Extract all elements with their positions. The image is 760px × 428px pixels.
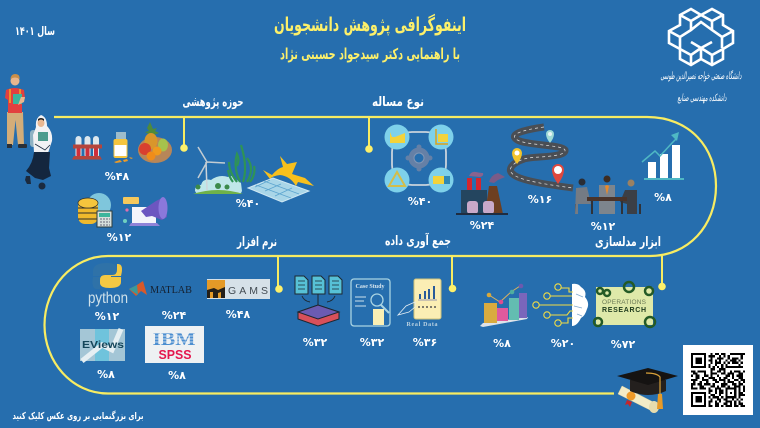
value: 12% tool top: %۱۲ bbox=[591, 220, 616, 233]
heading: research area: حوزه پژوهشی bbox=[182, 95, 244, 110]
logo: IBM SPSS: IBM bbox=[152, 329, 196, 349]
icon: seaweed bbox=[228, 145, 254, 182]
value: 12% research: %۱۲ bbox=[107, 231, 132, 244]
icon: case study bbox=[351, 279, 390, 326]
icon: female student bbox=[25, 115, 52, 190]
value: 20% brain: %۲۰ bbox=[551, 337, 575, 350]
icon: 3D bar chart bbox=[480, 284, 528, 327]
footer note: برای بزرگنمایی بر روی عکس کلیک کنید bbox=[12, 410, 144, 422]
year label: سال ۱۴۰۱ bbox=[15, 24, 55, 38]
icon: factory bbox=[456, 172, 508, 215]
value: 16% problem: %۱۶ bbox=[528, 193, 552, 206]
heading: software: نرم افزار bbox=[236, 235, 277, 250]
value: 8% eviews: %۸ bbox=[97, 368, 115, 381]
icon: university logo bbox=[669, 9, 733, 65]
value: 40% energy: %۴۰ bbox=[236, 197, 260, 210]
icon: solar panel and sun bbox=[248, 156, 314, 202]
value: 24% problem: %۲۴ bbox=[470, 219, 495, 232]
logo: MATLAB: MATLAB bbox=[150, 284, 192, 296]
value: 24% matlab: %۲۴ bbox=[162, 309, 187, 322]
value: 40% problem: %۴۰ bbox=[408, 195, 432, 208]
icon: python logo bbox=[88, 263, 128, 307]
icon: male student bbox=[5, 74, 27, 148]
logo: IBM SPSS bbox=[145, 326, 204, 363]
heading: modeling tool: ابزار مدلسازی bbox=[595, 235, 661, 250]
icon: AI brain bbox=[533, 284, 588, 326]
icon: operations research: OPERATIONS bbox=[602, 299, 647, 306]
icon: winding road with pins bbox=[510, 127, 573, 188]
value: 32% documents: %۳۲ bbox=[303, 336, 328, 349]
icon: real data tablet bbox=[398, 279, 441, 328]
icon: supply chain network bbox=[384, 124, 454, 192]
value: 72% OR: %۷۲ bbox=[611, 338, 636, 351]
icon: graduation cap and diploma bbox=[617, 368, 678, 413]
icon: fruit plate bbox=[138, 122, 172, 163]
logo: MATLAB bbox=[129, 281, 192, 296]
value: 8% spss: %۸ bbox=[168, 369, 186, 382]
value: 48% gams: %۴۸ bbox=[226, 308, 251, 321]
QR code bbox=[683, 345, 753, 415]
value: 48% research: %۴۸ bbox=[105, 170, 130, 183]
heading: data collection: جمع آوری داده bbox=[385, 232, 451, 249]
icon: real data tablet: Real Data bbox=[406, 322, 438, 328]
value: 36% real data: %۳۶ bbox=[413, 336, 437, 349]
logo: IBM SPSS: SPSS bbox=[158, 347, 192, 362]
icon: operations research bbox=[594, 282, 655, 327]
logo: GAMS: GAMS bbox=[228, 285, 268, 297]
heading: problem type: نوع مساله bbox=[372, 95, 424, 110]
icon: case study: Case Study bbox=[356, 284, 384, 290]
icon: documents into database bbox=[295, 276, 342, 326]
subtitle: supervisor: با راهنمایی دکتر سیدجواد حسینی نژاد bbox=[280, 45, 460, 63]
value: 32% case study: %۳۲ bbox=[360, 336, 385, 349]
value: 8% chart: %۸ bbox=[493, 337, 511, 350]
icon: business meeting bbox=[575, 176, 640, 214]
value: 8% tool top: %۸ bbox=[654, 191, 672, 204]
timeline nodes bbox=[180, 144, 666, 293]
icon: megaphone bbox=[123, 197, 168, 226]
icon: test tubes bbox=[72, 136, 102, 160]
value: 12% python: %۱۲ bbox=[95, 310, 120, 323]
logo: GAMS bbox=[207, 279, 270, 299]
logo: EViews bbox=[80, 329, 125, 361]
logo: EViews: EViews bbox=[82, 339, 124, 351]
icon: wind turbine landscape bbox=[193, 147, 243, 194]
icon: medicine bottle bbox=[114, 132, 133, 163]
title: اینفوگرافی پژوهش دانشجویان bbox=[274, 13, 466, 36]
icon: coins and calculator bbox=[78, 193, 112, 227]
icon: operations research: RESEARCH bbox=[602, 307, 646, 314]
icon: python logo: python bbox=[88, 290, 128, 307]
timeline path bbox=[44, 117, 716, 394]
icon: growth bars bbox=[642, 132, 684, 180]
